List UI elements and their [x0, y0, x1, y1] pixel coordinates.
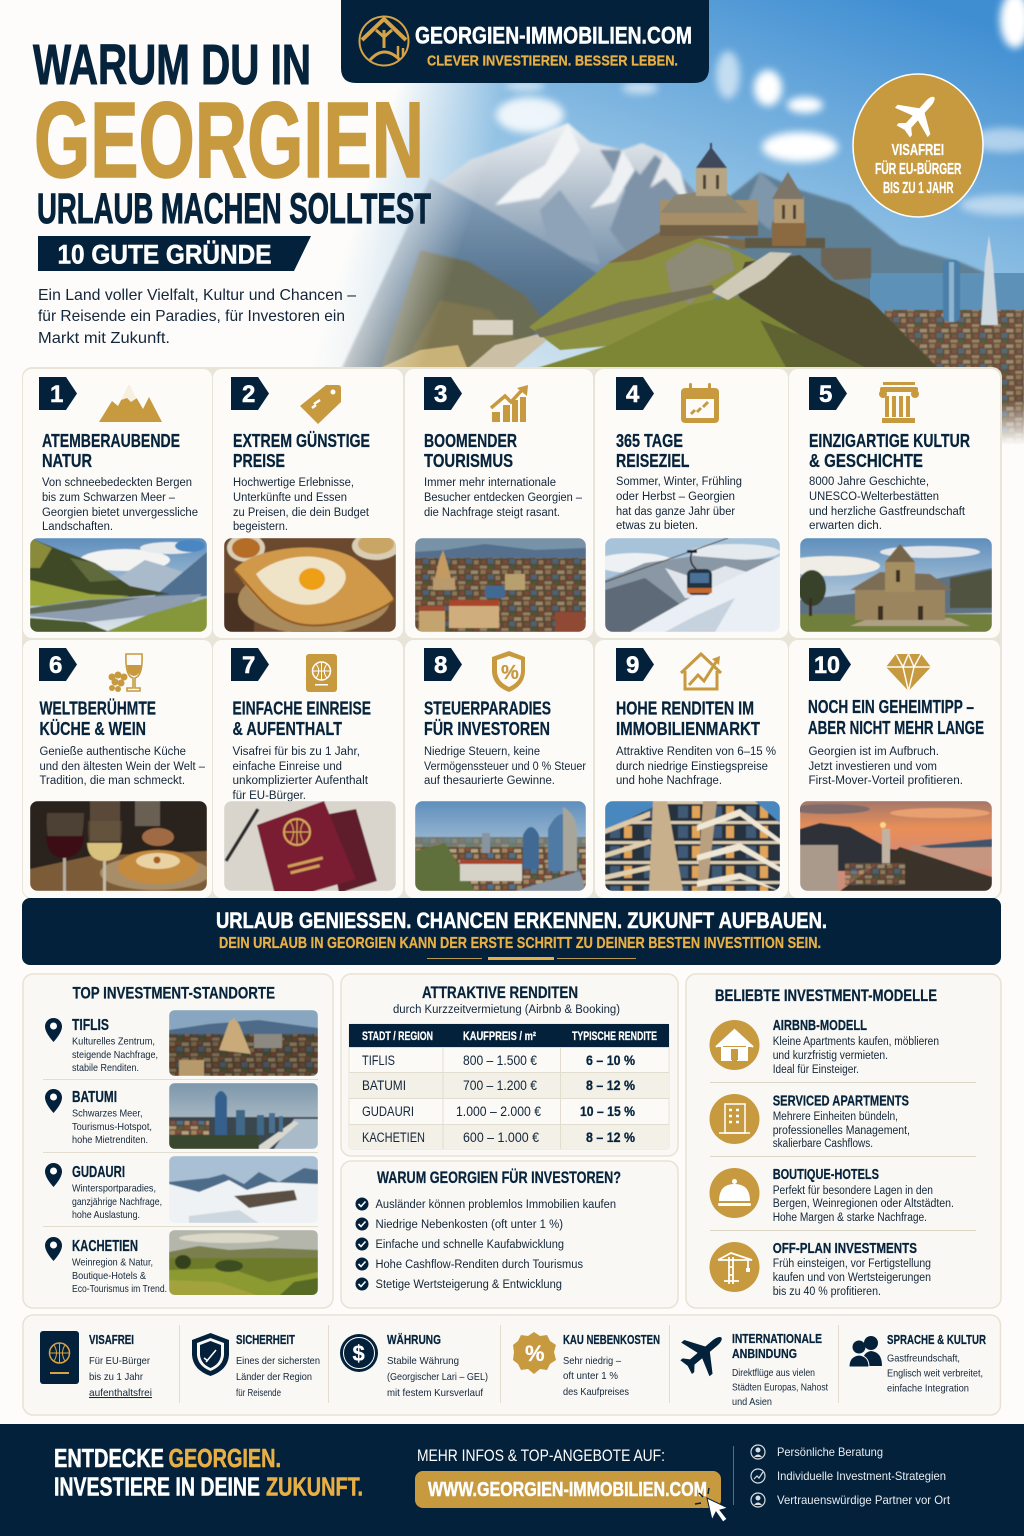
card 7: entry: & AUFENTHALT — [232, 719, 342, 739]
icon: calendar — [681, 383, 719, 423]
footer slogan: GEORGIEN. — [168, 1443, 281, 1473]
card 4: year-round: 4 — [626, 381, 640, 408]
logo wordmark — [415, 22, 692, 70]
card 2: prices: Unterkünfte und Essen — [233, 492, 347, 504]
card 8: taxes: STEUERPARADIES — [424, 698, 551, 718]
icon: plane — [887, 82, 950, 146]
icon: passport — [306, 654, 337, 692]
slogan banner — [22, 898, 1001, 965]
model: Airbnb: Ideal für Einsteiger. — [773, 1064, 859, 1076]
location: Batumi: Schwarzes Meer, — [72, 1108, 142, 1120]
fact: low fees — [513, 1332, 660, 1398]
icon: diamond — [886, 654, 931, 691]
table: 600 – 1.000 € — [463, 1130, 539, 1145]
table: 800 – 1.500 € — [463, 1053, 537, 1068]
location: Kachetien: Eco-Tourismus im Trend. — [72, 1283, 167, 1295]
card 6: food and wine — [23, 640, 212, 898]
table: KAUFPREIS / m² — [463, 1029, 536, 1043]
title: WARUM DU IN — [33, 33, 311, 97]
card 5: culture: EINZIGARTIGE KULTUR — [809, 431, 970, 451]
footer slogan: ENTDECKE — [54, 1443, 164, 1473]
card 1: nature: NATUR — [42, 451, 92, 471]
fact strip — [23, 1315, 1000, 1415]
fact: language and culture: Englisch weit verbreitet, — [887, 1368, 983, 1380]
fact: safety: Eines der sichersten — [236, 1355, 320, 1367]
table: TIFLIS — [362, 1053, 395, 1068]
card 4: year-round — [595, 369, 788, 638]
location: Gudauri: GUDAURI — [72, 1164, 125, 1181]
card 5: culture: 5 — [819, 381, 832, 408]
subtitle banner: 10 GUTE GRÜNDE — [58, 240, 272, 270]
website button — [415, 1471, 721, 1508]
card 1: nature: Von schneebedeckten Bergen — [42, 477, 192, 489]
card 5: culture: erwarten dich. — [809, 520, 882, 532]
logo wordmark: CLEVER INVESTIEREN. BESSER LEBEN. — [427, 52, 678, 70]
fact: currency: (Georgischer Lari – GEL) — [387, 1371, 488, 1383]
card 5: culture: & GESCHICHTE — [809, 451, 923, 471]
card 4: year-round: oder Herbst – Georgien — [616, 491, 735, 503]
visa badge: VISAFREI — [892, 142, 944, 159]
footer slogan: INVESTIERE IN DEINE — [54, 1472, 260, 1502]
photo: khachapuri — [224, 532, 400, 634]
table: TYPISCHE RENDITE — [572, 1029, 657, 1043]
logo wordmark: GEORGIEN-IMMOBILIEN.COM — [415, 22, 692, 50]
location: Kachetien: KACHETIEN — [72, 1238, 138, 1255]
card 9: real estate yields: Attraktive Renditen von 6–15 % — [616, 746, 776, 758]
icon: percent shield: % — [501, 662, 519, 684]
table: KACHETIEN — [362, 1130, 425, 1145]
location: Tiflis: stabile Renditen. — [72, 1062, 139, 1074]
card 2: prices: begeistern. — [233, 521, 288, 533]
model: boutique hotels: BOUTIQUE-HOTELS — [773, 1167, 879, 1183]
church — [660, 143, 806, 246]
panel: top investment locations — [23, 974, 333, 1308]
card 3: tourism: 3 — [434, 381, 447, 408]
benefits list: Individuelle Investment-Strategien — [777, 1469, 946, 1483]
card 8: taxes: auf thesaurierte Gewinne. — [424, 775, 555, 787]
card 7: entry: EINFACHE EINREISE — [232, 698, 371, 718]
table: 1.000 – 2.000 € — [456, 1104, 541, 1119]
icon: click cursor — [695, 1488, 728, 1522]
card 7: entry: für EU-Bürger. — [232, 790, 306, 802]
checklist: Ausländer können problemlos Immobilien kaufen — [376, 1199, 616, 1211]
model: serviced apartments: skalierbare Cashflows. — [773, 1138, 873, 1150]
benefits list: Vertrauenswürdige Partner vor Ort — [777, 1493, 951, 1507]
card 9: real estate yields — [595, 640, 788, 898]
table: 6 – 10 % — [586, 1052, 635, 1068]
location: Batumi: Tourismus-Hotspot, — [72, 1121, 152, 1133]
photo: modern apartments — [605, 801, 780, 891]
model: boutique hotels: Perfekt für besondere Lagen in den — [773, 1185, 933, 1197]
fact: connections: und Asien — [732, 1396, 772, 1408]
card 10: insider tip: NOCH EIN GEHEIMTIPP – — [808, 697, 974, 717]
icon: grapes and wine glass — [108, 654, 142, 692]
intro text: Markt mit Zukunft. — [38, 330, 170, 347]
photo: stone church — [780, 538, 992, 632]
card 7: entry: einfache Einreise und — [232, 761, 342, 773]
model: Airbnb: AIRBNB-MODELL — [773, 1018, 867, 1034]
card 2: prices: 2 — [242, 381, 255, 408]
card 3: tourism: TOURISMUS — [424, 451, 513, 471]
photo: gondola over snow — [595, 538, 780, 632]
fact: safety: SICHERHEIT — [236, 1333, 295, 1347]
card 9: real estate yields: HOHE RENDITEN IM — [616, 698, 754, 718]
intro text — [38, 287, 356, 347]
title — [33, 33, 431, 233]
fact: currency: mit festem Kursverlauf — [387, 1387, 483, 1399]
panel: attractive returns table: ATTRAKTIVE RENDITEN — [422, 983, 578, 1002]
card 1: nature: Landschaften. — [42, 521, 113, 533]
card 3: tourism: die Nachfrage steigt rasant. — [424, 507, 560, 519]
photo: sunset city — [790, 801, 992, 891]
fact: visa — [40, 1331, 152, 1399]
website button: WWW.GEORGIEN-IMMOBILIEN.COM — [428, 1479, 707, 1501]
fact: connections: Direktflüge aus vielen — [732, 1367, 815, 1379]
footer slogan: ZUKUNFT. — [266, 1472, 363, 1502]
slogan banner: DEIN URLAUB IN GEORGIEN KANN DER ERSTE SCHRITT ZU DEINER BESTEN INVESTITION SEIN. — [219, 935, 821, 952]
model: Airbnb: Kleine Apartments kaufen, möblieren — [773, 1036, 939, 1048]
icon: percent shield — [492, 651, 525, 692]
fact: connections: ANBINDUNG — [732, 1347, 797, 1361]
card 8: taxes: Vermögenssteuer und 0 % Steuer — [424, 761, 586, 773]
checklist: Stetige Wertsteigerung & Entwicklung — [376, 1279, 562, 1291]
model: serviced apartments: Mehrere Einheiten bündeln, — [773, 1111, 898, 1123]
location: Tiflis: Kulturelles Zentrum, — [72, 1036, 155, 1048]
fact: low fees: % — [525, 1341, 545, 1366]
location: Gudauri — [45, 1156, 318, 1223]
intro text: Ein Land voller Vielfalt, Kultur und Chancen – — [38, 287, 356, 304]
card 1: nature: ATEMBERAUBENDE — [42, 431, 180, 451]
fact: low fees: oft unter 1 % — [563, 1370, 618, 1382]
icon: mountains — [99, 385, 162, 422]
card 10: insider tip — [789, 640, 1000, 898]
table: BATUMI — [362, 1078, 406, 1093]
fact: connections: Städten Europas, Nahost — [732, 1382, 828, 1394]
location: Kachetien: Boutique-Hotels & — [72, 1270, 146, 1282]
fact: connections — [672, 1321, 828, 1408]
card 8: taxes: Niedrige Steuern, keine — [424, 746, 540, 758]
card 2: prices: zu Preisen, die dein Budget — [233, 507, 370, 519]
card 7: entry — [213, 640, 403, 901]
card 10: insider tip: First-Mover-Vorteil profitieren. — [808, 775, 963, 787]
fact: visa: VISAFREI — [89, 1333, 134, 1347]
model: off-plan: OFF-PLAN INVESTMENTS — [773, 1241, 917, 1257]
fact: low fees: des Kaufpreises — [563, 1386, 629, 1398]
table: 700 – 1.200 € — [463, 1078, 537, 1093]
title: URLAUB MACHEN SOLLTEST — [37, 185, 431, 233]
fact: currency: $ — [352, 1341, 365, 1366]
fact: language and culture: Gastfreundschaft, — [887, 1352, 960, 1364]
card 4: year-round: Sommer, Winter, Frühling — [616, 476, 742, 488]
fact: visa: Für EU-Bürger — [89, 1355, 150, 1367]
checklist: Niedrige Nebenkosten (oft unter 1 %) — [376, 1219, 563, 1231]
fact: safety: Länder der Region — [236, 1371, 312, 1383]
model: off-plan: kaufen und von Wertsteigerungen — [773, 1272, 931, 1284]
fact: visa: aufenthaltsfrei — [89, 1387, 152, 1399]
icon: column — [879, 382, 919, 423]
panel: top investment locations: TOP INVESTMENT-STANDORTE — [72, 984, 275, 1002]
visa badge: FÜR EU-BÜRGER — [875, 161, 962, 178]
location: Tiflis: steigende Nachfrage, — [72, 1049, 158, 1061]
logo panel — [341, 0, 709, 83]
location: Kachetien: Weinregion & Natur, — [72, 1256, 153, 1268]
model: boutique hotels: Bergen, Weinregionen oder Altstädten. — [773, 1198, 954, 1210]
card 3: tourism: Besucher entdecken Georgien – — [424, 492, 583, 504]
card 6: food and wine: und den ältesten Wein der Welt – — [40, 761, 206, 773]
benefits list — [751, 1445, 951, 1507]
card 4: year-round: REISEZIEL — [616, 451, 690, 471]
photo: wine and bread — [30, 801, 210, 891]
card 6: food and wine: KÜCHE & WEIN — [40, 719, 146, 739]
photo: skyline with towers — [415, 801, 586, 891]
fact: safety: für Reisende — [236, 1387, 281, 1399]
benefits list: Persönliche Beratung — [777, 1445, 883, 1459]
fact: currency: Stabile Währung — [387, 1355, 459, 1367]
card 8: taxes: 8 — [434, 652, 447, 679]
model: Airbnb — [710, 1018, 939, 1076]
model: boutique hotels — [710, 1167, 954, 1224]
checklist — [356, 1198, 616, 1291]
model: off-plan: bis zu 40 % profitieren. — [773, 1286, 881, 1298]
icon: house with arrow — [681, 654, 721, 689]
card 10: insider tip: 10 — [814, 652, 840, 679]
card 5: culture: UNESCO-Welterbestätten — [809, 491, 939, 503]
visa badge: BIS ZU 1 JAHR — [883, 180, 954, 197]
location: Kachetien — [45, 1230, 318, 1296]
card 6: food and wine: 6 — [49, 652, 62, 679]
photo: mountain lake — [30, 538, 207, 632]
card 5: culture: und herzliche Gastfreundschaft — [809, 506, 966, 518]
card 9: real estate yields: IMMOBILIENMARKT — [616, 719, 760, 739]
panel: attractive returns table — [341, 974, 678, 1156]
card 1: nature: 1 — [50, 381, 63, 408]
panel: investment models: BELIEBTE INVESTMENT-MODELLE — [715, 986, 937, 1005]
card 5: culture: 8000 Jahre Geschichte, — [809, 476, 929, 488]
card 2: prices: Hochwertige Erlebnisse, — [233, 477, 354, 489]
cards backdrop — [22, 367, 1002, 899]
card 6: food and wine: Tradition, die man schmeckt. — [40, 775, 185, 787]
model: off-plan — [710, 1241, 931, 1298]
location: Gudauri: Wintersportparadies, — [72, 1182, 156, 1194]
location: Tiflis — [45, 1010, 318, 1076]
footer: MEHR INFOS & TOP-ANGEBOTE AUF: — [417, 1446, 665, 1465]
intro text: für Reisende ein Paradies, für Investoren ein — [38, 308, 345, 325]
location: Tiflis: TIFLIS — [72, 1017, 109, 1034]
checklist: Einfache und schnelle Kaufabwicklung — [376, 1239, 564, 1251]
card 10: insider tip: Georgien ist im Aufbruch. — [808, 746, 939, 758]
panel: why Georgia for investors: WARUM GEORGIEN FÜR INVESTOREN? — [377, 1168, 621, 1187]
footer slogan — [54, 1443, 363, 1502]
card 1: nature — [23, 369, 212, 638]
model: off-plan: Früh einsteigen, vor Fertigstellung — [773, 1258, 931, 1270]
location: Batumi: hohe Mietrenditen. — [72, 1134, 148, 1146]
photo: passports — [224, 801, 396, 891]
card 6: food and wine: Genieße authentische Küche — [40, 746, 186, 758]
title: GEORGIEN — [34, 79, 424, 200]
card 9: real estate yields: und hohe Nachfrage. — [616, 775, 722, 787]
fact: visa: bis zu 1 Jahr — [89, 1371, 143, 1383]
fact: currency — [340, 1332, 488, 1399]
table: GUDAURI — [362, 1104, 414, 1119]
table: STADT / REGION — [362, 1029, 433, 1043]
icon: price tag — [300, 385, 341, 424]
card 5: culture — [780, 369, 1000, 638]
model: serviced apartments — [710, 1094, 910, 1150]
card 3: tourism — [405, 369, 593, 638]
fact: language and culture — [849, 1333, 986, 1394]
card 8: taxes: FÜR INVESTOREN — [424, 719, 550, 739]
card 2: prices: PREISE — [233, 451, 285, 471]
visa badge — [853, 74, 983, 217]
model: serviced apartments: SERVICED APARTMENTS — [773, 1094, 909, 1110]
fact: connections: INTERNATIONALE — [732, 1332, 822, 1346]
location: Batumi: BATUMI — [72, 1089, 117, 1106]
card 2: prices — [213, 369, 403, 638]
location: Batumi — [45, 1083, 318, 1149]
photo: old town — [415, 538, 586, 632]
model: boutique hotels: Hohe Margen & starke Nachfrage. — [773, 1212, 927, 1224]
fact: low fees: Sehr niedrig – — [563, 1355, 621, 1367]
card 7: entry: 7 — [242, 652, 255, 679]
card 8: taxes — [405, 640, 593, 898]
table: 8 – 12 % — [586, 1129, 635, 1145]
card 4: year-round: etwas zu bieten. — [616, 520, 698, 532]
card 2: prices: EXTREM GÜNSTIGE — [233, 431, 370, 451]
checklist: Hohe Cashflow-Renditen durch Tourismus — [376, 1259, 583, 1271]
panel: why Georgia for investors — [341, 1161, 678, 1308]
footer — [0, 1424, 1024, 1536]
location: Gudauri: ganzjährige Nachfrage, — [72, 1196, 162, 1208]
card 9: real estate yields: 9 — [626, 652, 639, 679]
card 7: entry: unkomplizierter Aufenthalt — [232, 775, 369, 787]
hero photo: Georgian church on a hill — [300, 0, 1024, 445]
fact: currency: WÄHRUNG — [387, 1332, 441, 1347]
card 4: year-round: 365 TAGE — [616, 431, 683, 451]
panel: attractive returns table: durch Kurzzeitvermietung (Airbnb & Booking) — [393, 1004, 620, 1016]
card 3: tourism: Immer mehr internationale — [424, 477, 556, 489]
model: serviced apartments: professionelles Management, — [773, 1125, 910, 1137]
icon: rising chart — [491, 385, 528, 422]
card 6: food and wine: WELTBERÜHMTE — [40, 698, 156, 718]
card 1: nature: Georgien bietet unvergessliche — [42, 507, 198, 519]
panel: investment models — [686, 974, 1001, 1308]
card 4: year-round: hat das ganze Jahr über — [616, 506, 735, 518]
card 7: entry: Visafrei für bis zu 1 Jahr, — [232, 746, 360, 758]
location: Gudauri: hohe Auslastung. — [72, 1209, 140, 1221]
fact: safety — [192, 1333, 320, 1399]
table: 8 – 12 % — [586, 1077, 635, 1093]
table — [349, 1024, 669, 1149]
card 9: real estate yields: durch niedrige Einstiegspreise — [616, 761, 768, 773]
card 10: insider tip: Jetzt investieren und vom — [808, 761, 937, 773]
model: Airbnb: und kurzfristig vermieten. — [773, 1050, 888, 1062]
table: 10 – 15 % — [580, 1103, 635, 1119]
fact: language and culture: einfache Integration — [887, 1382, 969, 1394]
card 3: tourism: BOOMENDER — [424, 431, 517, 451]
logo icon: house in a circle — [360, 16, 408, 66]
fact: low fees: KAU NEBENKOSTEN — [563, 1333, 660, 1347]
slogan banner: URLAUB GENIESSEN. CHANCEN ERKENNEN. ZUKUNFT AUFBAUEN. — [216, 908, 827, 933]
card 1: nature: bis zum Schwarzen Meer – — [42, 492, 176, 504]
fact: language and culture: SPRACHE & KULTUR — [887, 1333, 986, 1347]
